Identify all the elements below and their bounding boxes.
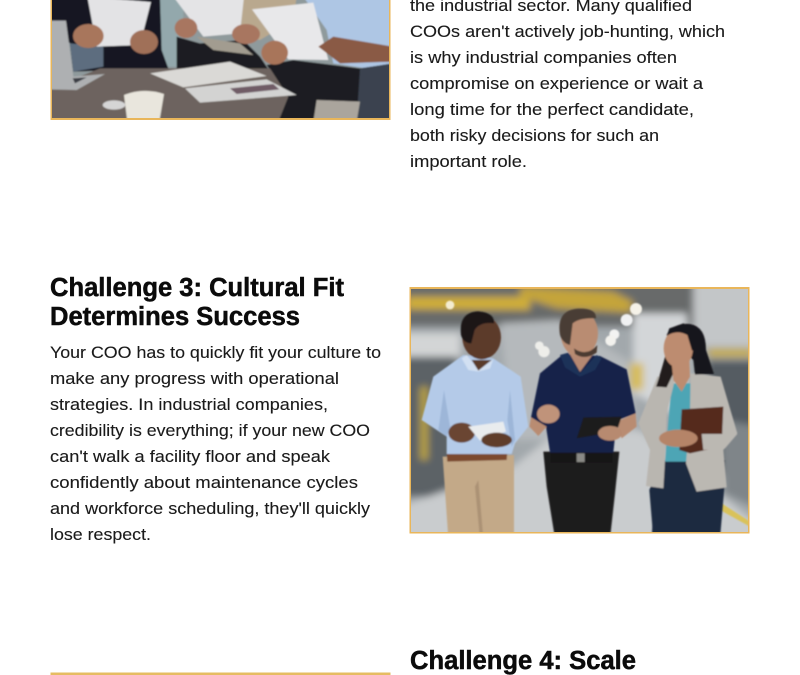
photo: top edge of challenge 4 image: [50, 672, 390, 675]
middle man: [543, 452, 619, 538]
text block: challenge 3 body: make any progress with operational: [50, 369, 339, 388]
woman: [649, 460, 725, 538]
text block: challenge 3 body: lose respect.: [50, 525, 151, 544]
heading: challenge 3: Determines Success: [50, 303, 300, 331]
text block: challenge 2 body continuation: is why industrial companies often: [410, 48, 677, 67]
photo: three colleagues walking through a factory: [410, 287, 750, 534]
left man: [443, 455, 514, 538]
text block: challenge 3 body: confidently about maintenance cycles: [50, 473, 358, 492]
text block: challenge 2 body continuation: COOs aren't actively job-hunting, which: [410, 22, 725, 41]
text block: challenge 3 body: can't walk a facility floor and speak: [50, 447, 331, 466]
text block: challenge 2 body continuation: both risky decisions for such an: [410, 126, 659, 145]
text block: challenge 3 body: strategies. In industrial companies,: [50, 395, 328, 414]
text block: challenge 2 body continuation: long time for the perfect candidate,: [410, 100, 694, 119]
text block: challenge 3 body: [50, 343, 381, 544]
text block: challenge 3 body: and workforce scheduling, they'll quickly: [50, 499, 371, 518]
heading: challenge 3: Challenge 3: Cultural Fit: [50, 274, 345, 302]
text block: challenge 3 body: credibility is everything; if your new COO: [50, 421, 370, 440]
text block: challenge 2 body continuation: [410, 0, 725, 171]
text block: challenge 3 body: Your COO has to quickly fit your culture to: [50, 343, 381, 362]
heading: challenge 4: Challenge 4: Scale: [410, 647, 636, 675]
photo: executives reviewing documents at a table: [47, 0, 397, 123]
text block: challenge 2 body continuation: important role.: [410, 152, 527, 171]
text block: challenge 2 body continuation: compromise on experience or wait a: [410, 74, 704, 93]
heading: challenge 3: [50, 274, 345, 331]
